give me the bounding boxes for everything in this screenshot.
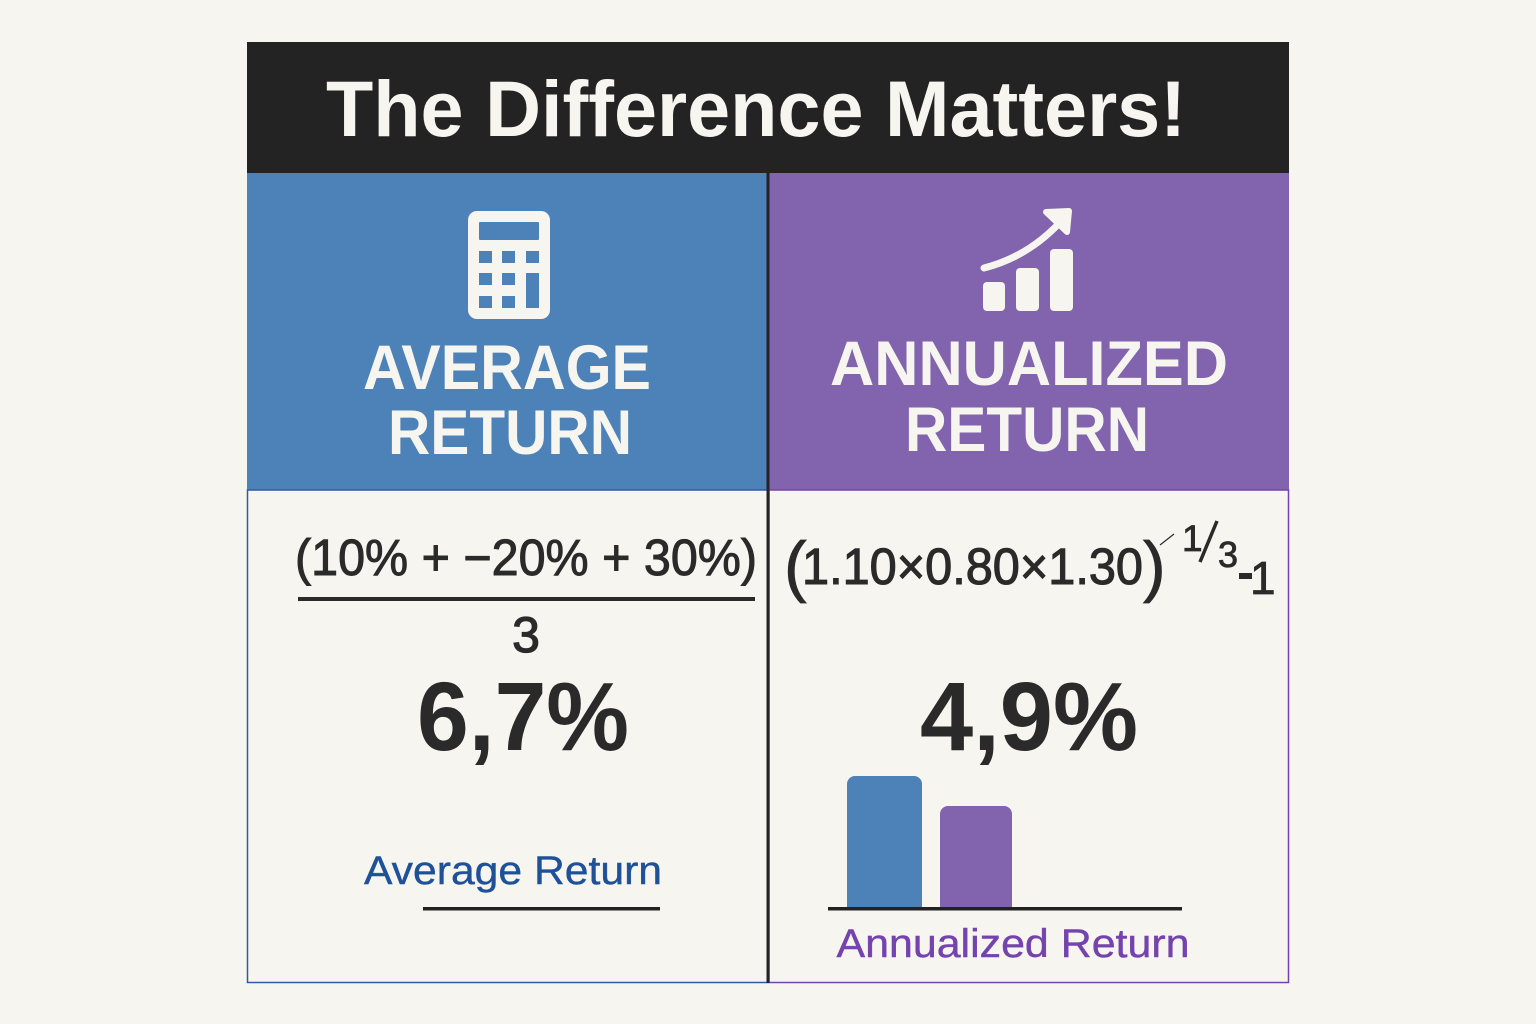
annualized return formula: 1.10×0.80×1.30 (802, 538, 1143, 595)
annualized return heading: RETURN (905, 395, 1149, 465)
icon: calculator (468, 211, 550, 319)
panel: annualized return body (769, 490, 1288, 982)
average return heading: AVERAGE (363, 333, 651, 403)
annualized return formula: ( (784, 528, 807, 604)
annualized return formula (784, 518, 1276, 604)
average return heading (363, 333, 651, 468)
title banner: The Difference Matters! (326, 64, 1186, 153)
annualized return heading: ANNUALIZED (830, 329, 1228, 399)
annualized return value: 4,9% (920, 662, 1138, 771)
average return heading: RETURN (388, 398, 632, 468)
annualized return label: Annualized Return (836, 922, 1190, 966)
average return formula: (10% + −20% + 30%) (295, 529, 757, 586)
title banner (247, 42, 1289, 173)
annualized return formula: 3 (1218, 534, 1238, 575)
panel: annualized return header (769, 173, 1289, 490)
average return formula (295, 529, 757, 663)
panel: average return header (247, 173, 767, 490)
annualized return formula: ) (1143, 528, 1166, 604)
average return label (364, 849, 662, 910)
icon: growth chart with arrow (983, 211, 1073, 311)
average return value: 6,7% (417, 662, 629, 771)
annualized return formula: 1 (1250, 552, 1276, 604)
annualized return formula: 1 (1182, 518, 1203, 559)
center divider (766, 173, 770, 983)
average return formula: 3 (512, 607, 540, 663)
average return label: Average Return (364, 849, 662, 893)
panel: average return body (248, 490, 768, 982)
comparison bar chart (828, 776, 1182, 910)
annualized return heading (830, 329, 1228, 465)
